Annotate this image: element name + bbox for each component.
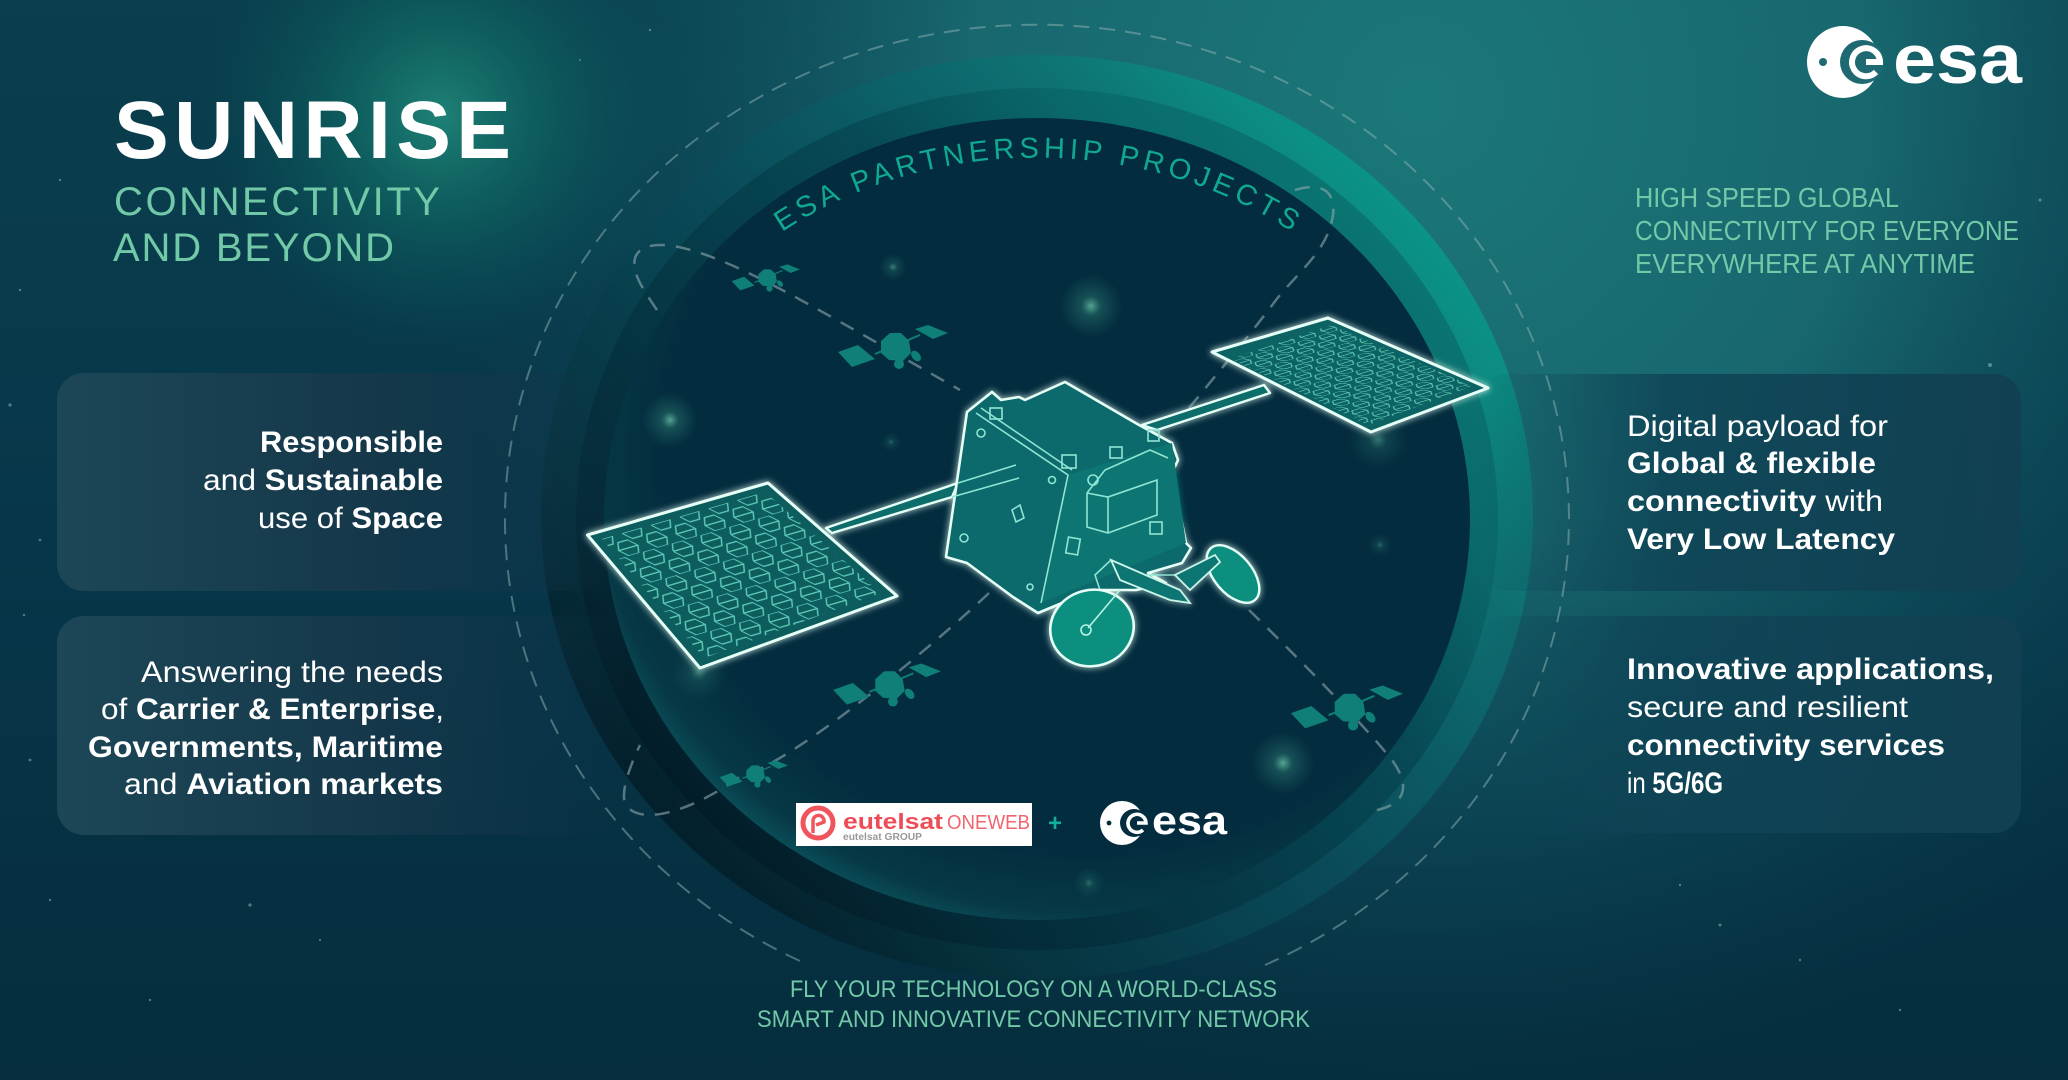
tagline top right: HIGH SPEED GLOBAL — [1635, 182, 1899, 213]
panel text: markets: of Carrier & Enterprise , — [101, 693, 444, 726]
panel text: responsible: Responsible — [260, 426, 443, 459]
panel: answering the needs — [57, 616, 627, 835]
eutelsat oneweb logo: ONEWEB — [947, 812, 1030, 834]
feed arm — [1111, 555, 1220, 603]
dashed outer orbit — [505, 25, 1569, 965]
eutelsat oneweb logo — [796, 803, 1032, 846]
antenna boom right — [1142, 385, 1270, 430]
esa logo top right: esa — [1893, 20, 2023, 98]
panel text: responsible: use of Space — [258, 502, 443, 535]
partner logos — [796, 799, 1228, 846]
satellite body — [946, 382, 1191, 613]
panel: digital payload — [1480, 374, 2021, 591]
solar panel left — [588, 483, 897, 668]
panel: responsible and sustainable use of space — [57, 373, 627, 591]
concentric ring: middle — [576, 88, 1498, 950]
bottom tagline: FLY YOUR TECHNOLOGY ON A WORLD-CLASS — [790, 976, 1277, 1003]
panel text: markets — [88, 656, 444, 801]
subtitle: CONNECTIVITY — [114, 180, 440, 224]
panel text: markets: Governments, Maritime — [88, 731, 443, 764]
esa logo top right — [1807, 20, 2023, 98]
title: SUNRISE — [114, 85, 511, 176]
bottom tagline — [757, 976, 1310, 1033]
eutelsat oneweb logo: eutelsat GROUP — [843, 832, 922, 843]
small satellite icons — [720, 264, 1403, 788]
panel text: digital payload: Very Low Latency — [1627, 523, 1895, 556]
esa logo small: esa — [1152, 799, 1228, 843]
panel text: responsible — [203, 426, 443, 535]
tagline top right: EVERYWHERE AT ANYTIME — [1635, 248, 1975, 279]
panel: innovative applications — [1480, 616, 2021, 833]
plus sign: + — [1048, 810, 1062, 837]
panel text: digital payload — [1627, 410, 1895, 556]
panel text: digital payload: connectivity with — [1627, 485, 1883, 518]
antenna boom left — [826, 483, 958, 533]
eutelsat oneweb logo: eutelsat — [843, 809, 944, 834]
central satellite — [588, 318, 1488, 676]
title — [113, 85, 511, 270]
tagline top right: CONNECTIVITY FOR EVERYONE — [1635, 215, 2019, 246]
dashed orbit: top-left to bottom-right — [634, 245, 1403, 811]
panel text: responsible: and Sustainable — [203, 464, 443, 497]
panel text: digital payload: Global & flexible — [1627, 447, 1876, 480]
inner disc — [604, 118, 1470, 920]
tagline top right — [1635, 182, 2019, 279]
subtitle: AND BEYOND — [113, 226, 394, 270]
dashed orbit: top-right to bottom-left — [624, 187, 1333, 815]
panel text: markets: Answering the needs — [141, 656, 443, 689]
panel text: innovative applications — [1627, 653, 1994, 800]
subtitle — [113, 180, 440, 270]
glow spots — [642, 253, 1408, 899]
panel text: innovative applications: secure and resilient — [1627, 691, 1909, 724]
solar panel right — [1212, 318, 1488, 432]
panel text: innovative applications: in 5G/6G — [1627, 767, 1723, 800]
curved heading: ESA partnership projects: ESA PARTNERSHIP PROJECTS — [773, 138, 1299, 231]
panel text: innovative applications: Innovative applications, — [1627, 653, 1994, 686]
dish right — [1197, 536, 1269, 612]
concentric ring: outer — [541, 55, 1533, 979]
dish left — [1042, 580, 1142, 676]
panel text: markets: and Aviation markets — [124, 768, 443, 801]
panel text: innovative applications: connectivity services — [1627, 729, 1945, 762]
esa logo small — [1100, 799, 1228, 845]
panel text: digital payload: Digital payload for — [1627, 410, 1888, 443]
bottom tagline: SMART AND INNOVATIVE CONNECTIVITY NETWORK — [757, 1006, 1310, 1033]
